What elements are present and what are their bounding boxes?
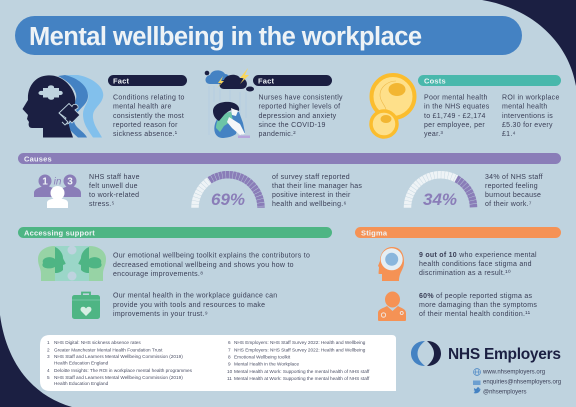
text: fact 1: mental health are [113,104,172,111]
text: cost per employee: Poor mental health [424,94,488,102]
text: cost per employee: in the NHS equates [424,104,490,111]
text: unwell due to stress: felt unwell due [89,183,138,190]
text: fact 2: depression and anxiety [258,113,337,120]
text: return on investment: mental health [502,104,548,111]
references panel: 1 [47,340,50,345]
references panel: NHS Digital: NHS sickness absence rates [54,340,141,345]
icon: coins with brain heads [371,75,414,137]
text: line manager: that their line manager has [272,183,362,190]
text: return on investment: interventions is [502,113,553,120]
heading pill: costs [418,75,561,86]
text: fact 1: reported reason for [113,122,178,129]
title: Mental wellbeing in the workplace [29,23,422,51]
references panel: Health Education England [54,360,109,366]
icon: 1 in 3 people [34,174,81,208]
text: wellbeing toolkit: Our emotional wellbeing toolkit explains the contributors to [113,253,310,260]
icon: doctor with stethoscope [378,292,406,321]
text: workplace guidance: provide you with tools and resources to make [113,302,265,309]
text: fact 2: since the COVID-19 [258,122,326,129]
text: workplace guidance: improvements in your trust.⁹ [113,311,208,318]
references panel: 3 [47,354,50,359]
gauge: 69% [195,175,261,209]
text: return on investment: £1.⁴ [502,131,516,138]
references panel: NHS Employers: NHS Staff Survey 2022: Health and Wellbeing [234,348,366,352]
text: fact 2: reported higher levels of [258,104,340,111]
references panel: Deloitte Insights: The ROI in workplace mental health programmes [54,368,193,373]
contact details: enquiries@nhsemployers.org [483,380,561,386]
icon: nurse under storm clouds [205,68,254,138]
icon: twitter [474,387,480,393]
heading pill: fact 2: Fact [258,76,275,85]
icon: 1 in 3 people: 3 [67,176,73,188]
text: line manager: positive interest in their [272,192,351,199]
text: unwell due to stress: to work-related [89,192,139,199]
references panel: NHS Staff and Learners Mental Wellbeing Commission (2019) [54,375,183,380]
text: unwell due to stress: stress.⁵ [89,201,115,208]
heading pill: fact 1: Fact [113,76,130,85]
icon: email [473,380,480,385]
text: 60%: of their mental health condition.¹¹ [419,311,531,318]
references panel: Greater Manchester Mental Health Foundation Trust [54,348,163,352]
heading pill: accessing support: Accessing support [24,228,95,238]
text: fact 1: Conditions relating to [113,94,185,102]
text: 9 out of 10: discrimination as a result.¹⁰ [419,269,511,277]
heading pill: fact 1 [108,75,187,86]
text: 9 out of 10: 9 out of 10 who experience mental [419,252,537,259]
gauge: 69%: 69% [211,190,245,209]
heading pill: accessing support [18,227,332,238]
text: cost per employee: year.³ [424,131,444,138]
references panel [40,335,396,391]
title [15,16,522,55]
icon: head with puzzle pieces [22,75,103,138]
references panel: 6 [228,340,231,345]
contact details [473,368,561,396]
icon: two heads with puzzle [38,246,106,281]
panel: fact 1 [22,75,187,138]
text: line manager: of survey staff reported [272,174,350,181]
icon: globe [474,368,480,376]
text: fact 1: sickness absence.¹ [113,131,178,138]
references panel: 8 [228,354,231,360]
text: 9 out of 10: health conditions face stigma and [419,261,532,268]
panel: stigma [355,227,561,321]
references panel: 11 [227,376,232,381]
contact details: @nhsemployers [483,390,526,396]
text: fact 1: consistently the most [113,113,184,120]
text: wellbeing toolkit: decreased emotional wellbeing and shows you how to [113,262,294,269]
gauge: 34%: 34% [423,190,457,209]
panel: causes [18,153,561,209]
text: cost per employee: per employee, per [424,122,485,129]
heading pill: stigma: Stigma [361,228,388,238]
references panel: Health Education England [54,381,109,386]
text: workplace guidance: Our mental health in the workplace guidance can [113,293,277,300]
text: 60%: more damaging than the symptoms [419,302,537,309]
logo: NHS Employers [411,341,561,366]
text: fact 2: Nurses have consistently [258,94,343,102]
text: 60%: 60% of people reported stigma as [419,293,532,300]
references panel: 5 [47,375,50,380]
heading pill: causes: Causes [24,154,52,164]
references panel: Emotional Wellbeing toolkit [234,354,291,360]
panel: costs [371,75,561,138]
icon: head with thought [378,247,404,281]
references panel: Mental Health in the Workplace [234,362,299,366]
text: line manager: health and wellbeing.⁶ [272,201,347,208]
icon: 1 in 3 people: in [54,176,62,188]
references panel: 7 [228,348,231,352]
references panel: NHS Employers: NHS Staff Survey 2022: Health and Wellbeing [234,340,366,345]
panel: fact 2 [205,68,343,138]
gauge: 34% [408,175,474,209]
text: wellbeing toolkit: encourage improvements.⁸ [113,271,203,278]
text: burnout: burnout because [485,192,541,199]
text: return on investment: £5.30 for every [502,122,553,129]
references panel: 10 [227,369,232,374]
icon: 1 in 3 people: 1 [42,176,48,188]
references panel: 4 [47,368,50,373]
references panel: NHS Staff and Learners Mental Wellbeing Commission (2019) [54,354,183,359]
references panel: 9 [228,362,231,366]
icon: first aid kit with heart [72,292,100,319]
references panel: 2 [47,348,50,352]
text: cost per employee: to £1,749 - £2,174 [424,113,486,120]
references panel: Mental Health at Work: Supporting the mental health of NHS staff [234,369,370,374]
text: burnout: 34% of NHS staff [485,174,543,181]
references panel: Mental Health at Work: Supporting the mental health of NHS staff [234,376,370,381]
logo: NHS Employers: NHS Employers [448,346,561,363]
heading pill: causes [18,153,561,164]
heading pill: stigma [355,227,561,238]
heading pill: costs: Costs [424,76,446,85]
panel: accessing support [18,227,332,319]
text: burnout: reported feeling [485,183,538,190]
text: return on investment: ROI in workplace [502,94,560,102]
text: burnout: of their work.⁷ [485,201,532,208]
text: unwell due to stress: NHS staff have [89,174,140,181]
contact details: www.nhsemployers.org [482,370,545,376]
text: fact 2: pandemic.² [258,131,296,138]
